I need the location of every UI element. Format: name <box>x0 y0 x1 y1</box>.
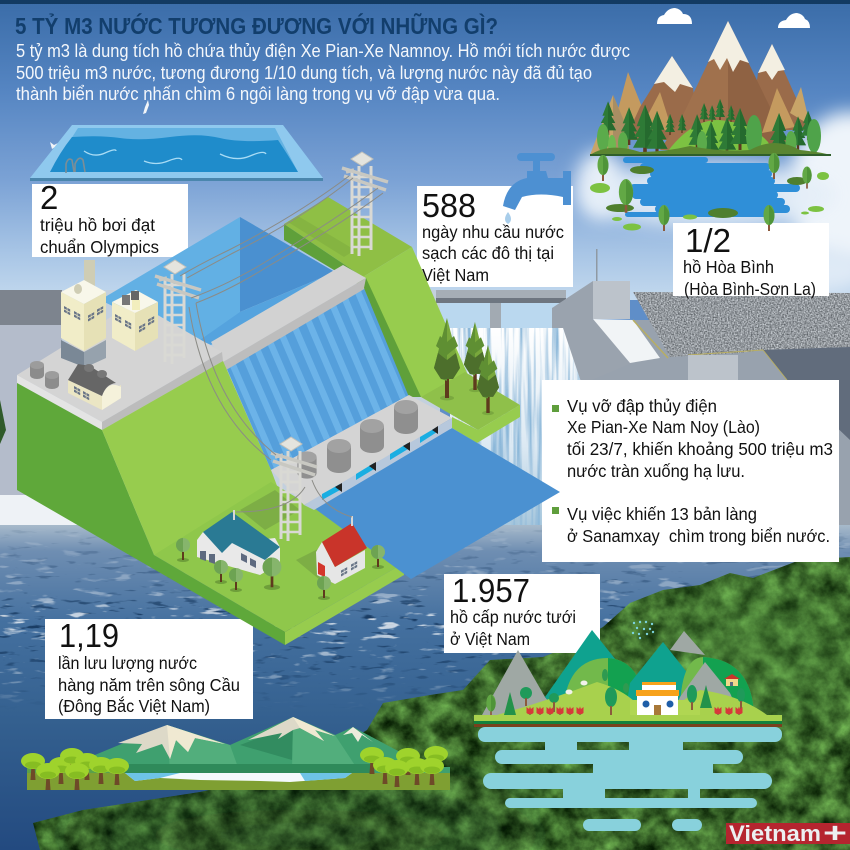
left green block <box>17 361 290 645</box>
illustration: isometric dam <box>17 152 560 645</box>
ground strip <box>474 715 782 727</box>
panel: dam collapse facts: tối 23/7, khiến khoảng 500 triệu m3 <box>567 439 833 459</box>
small hall <box>68 364 121 410</box>
blue-roof house <box>197 510 280 575</box>
tall building <box>61 260 106 368</box>
stat box: 1.19 times Cau river: lần lưu lượng nước <box>58 653 197 673</box>
lake water <box>623 157 800 217</box>
mountains <box>590 21 812 155</box>
right hill <box>284 197 468 397</box>
intro text: 500 triệu m3 nước, tương đương 1/10 dung tích, và lượng nước này đã đủ tạo <box>16 63 592 83</box>
panel: dam collapse facts <box>542 380 839 562</box>
power deck <box>271 395 452 510</box>
left slab <box>17 302 223 430</box>
stat box: 1,957 reservoirs: 1.957 <box>452 572 530 609</box>
mountains and hills <box>482 630 767 715</box>
panel: dam collapse facts: nước tràn xuống hạ lưu. <box>567 461 745 481</box>
stat box: 1.19 times Cau river <box>45 617 253 719</box>
panel: dam collapse facts: ở Sanamxay chìm trong biển nước. <box>567 526 830 546</box>
background: forest <box>0 550 850 850</box>
icon: clouds <box>657 8 810 28</box>
small tanks <box>30 361 59 389</box>
tree plateau <box>421 318 520 443</box>
reservoir <box>100 217 335 345</box>
lake plants <box>590 153 829 231</box>
stat box: 2 million pools <box>32 179 188 257</box>
stat box: 1.19 times Cau river: hàng năm trên sông Cầu <box>58 675 240 695</box>
illustration: green mountains banner <box>21 717 450 790</box>
dam crest road <box>211 265 366 362</box>
forest and hill <box>590 99 831 156</box>
background: sky <box>0 0 850 300</box>
illustration: mountain lake <box>590 21 831 231</box>
tulips <box>526 706 742 722</box>
logo: Vietnam+ <box>726 817 850 848</box>
stat box: 588 days <box>417 186 573 287</box>
short building <box>112 290 158 351</box>
red-roof house <box>316 516 367 584</box>
panel: dam collapse facts: Xe Pian-Xe Nam Noy (Lào) <box>567 417 760 437</box>
big lower water <box>314 428 560 579</box>
title: 5 TỶ M3 NƯỚC TƯƠNG ĐƯƠNG VỚI NHỮNG GÌ? <box>15 11 498 39</box>
stat box: 2 million pools: triệu hồ bơi đạt <box>40 215 155 235</box>
left tree cluster <box>21 748 129 790</box>
stat box: 588 days: 588 <box>422 187 476 224</box>
reservoir water bars <box>478 727 782 831</box>
panel: dam collapse facts: Vụ việc khiến 13 bản làng <box>567 504 757 524</box>
intro text <box>16 41 630 104</box>
ground and water <box>27 764 450 790</box>
logo: Vietnam+: Vietnam <box>729 821 821 846</box>
icon: swimming pool <box>30 125 323 181</box>
bullet <box>552 507 559 514</box>
small house <box>724 674 740 686</box>
background: river water <box>0 525 850 850</box>
stat box: 1.19 times Cau river: 1,19 <box>59 617 119 654</box>
intro text: 5 tỷ m3 là dung tích hồ chứa thủy điện Xe Pian-Xe Namnoy. Hồ mới tích nước được <box>16 41 630 61</box>
icon: water tap <box>503 153 571 224</box>
stat box: 1.19 times Cau river: (Đông Bắc Việt Nam) <box>58 695 210 716</box>
power lines <box>180 176 383 517</box>
trees and sheep <box>486 669 745 717</box>
power towers <box>155 152 388 541</box>
bullet <box>552 405 559 412</box>
spillway <box>223 278 421 470</box>
background: dam photo <box>0 249 850 545</box>
intro text: thành biển nước nhấn chìm 6 ngôi làng trong vụ vỡ đập vừa qua. <box>16 84 500 104</box>
stat box: 2 million pools: chuẩn Olympics <box>40 237 159 257</box>
stat box: 1/2 Hoa Binh: (Hòa Bình-Sơn La) <box>684 279 816 299</box>
stat box: 1/2 Hoa Binh <box>673 222 829 299</box>
stat box: 1,957 reservoirs: ở Việt Nam <box>450 629 530 649</box>
panel: dam collapse facts: Vụ vỡ đập thủy điện <box>567 396 717 416</box>
stat box: 1,957 reservoirs: hồ cấp nước tưới <box>450 607 576 627</box>
illustration: village and reservoir <box>474 621 782 831</box>
icon: birds <box>50 75 176 149</box>
house <box>636 682 679 715</box>
lower plateau <box>154 482 404 645</box>
mountains <box>90 717 450 773</box>
round trees <box>176 538 385 600</box>
logo: Vietnam+: + <box>823 817 847 848</box>
stat box: 588 days: Việt Nam <box>422 265 489 285</box>
right tree cluster <box>360 746 448 787</box>
stat box: 2 million pools: 2 <box>40 179 58 216</box>
stat box: 588 days: sạch các đô thị tại <box>422 243 554 263</box>
icon: water spray <box>632 621 654 639</box>
stat box: 1/2 Hoa Binh: hồ Hòa Bình <box>683 257 774 277</box>
stat box: 588 days: ngày nhu cầu nước <box>422 222 564 242</box>
stat box: 1/2 Hoa Binh: 1/2 <box>685 222 731 259</box>
stat box: 1,957 reservoirs <box>444 572 600 653</box>
